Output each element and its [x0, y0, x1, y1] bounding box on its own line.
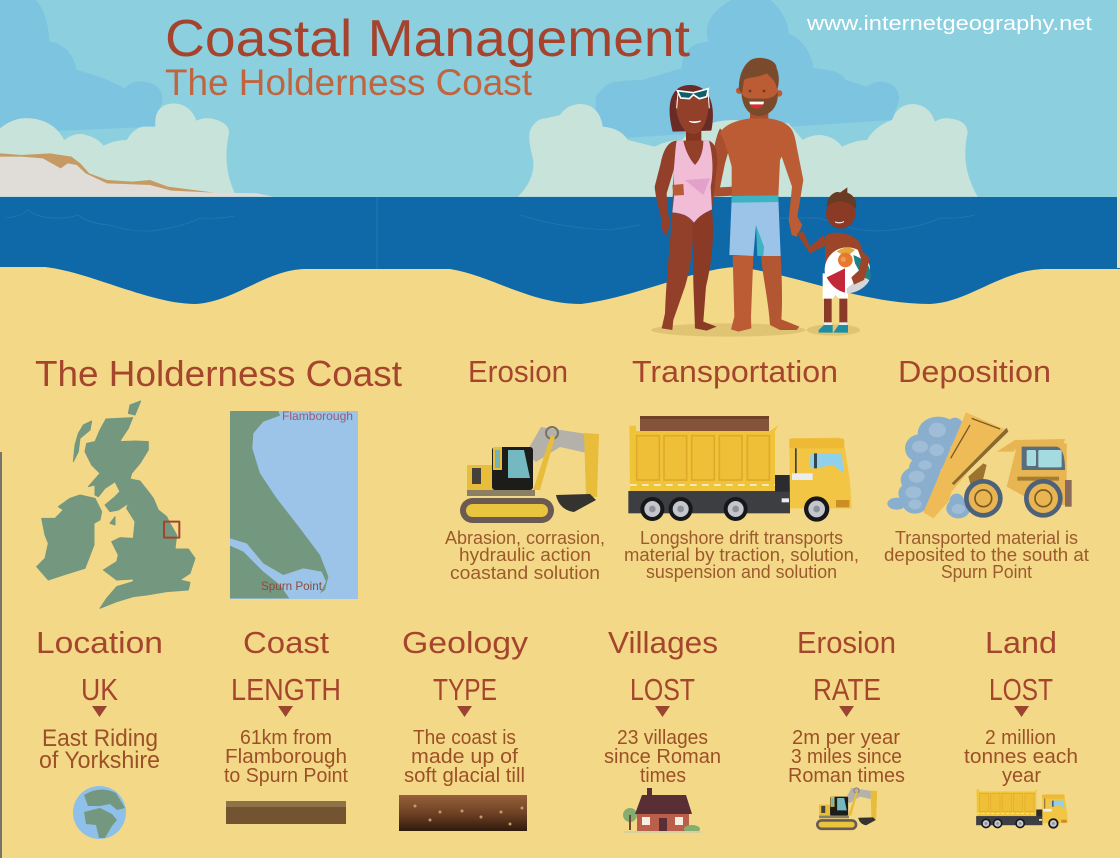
- icon: small excavator: [816, 788, 877, 830]
- text: erosion description: coastand solution: [450, 562, 600, 583]
- column: geology type: made up of: [411, 745, 518, 768]
- man's far arm: [708, 128, 733, 197]
- column: geology type: Geology: [402, 625, 529, 660]
- icon: house: [623, 788, 701, 833]
- sea: [0, 197, 1120, 307]
- column: erosion rate: [788, 625, 905, 830]
- column: villages lost: LOST: [630, 672, 695, 707]
- text: erosion description: [445, 527, 605, 583]
- background sky: [0, 0, 1120, 198]
- child with beach ball: [797, 187, 871, 333]
- icon: glacial till strata: [399, 795, 527, 831]
- icon: excavator: [460, 427, 599, 523]
- column: coast length: Flamborough: [225, 745, 347, 768]
- column: location: [36, 625, 163, 839]
- column: location: Location: [36, 625, 163, 660]
- column: villages lost: Villages: [608, 625, 718, 660]
- text: transportation description: [624, 527, 859, 582]
- map: UK location: [37, 401, 195, 608]
- column: coast length: to Spurn Point: [224, 764, 348, 787]
- column: coast length: Coast: [243, 625, 329, 660]
- text: erosion description: Abrasion, corrasion,: [445, 527, 605, 548]
- text: deposition description: [884, 527, 1089, 582]
- icon: tipper truck depositing rocks: [887, 412, 1072, 518]
- text: transportation description: suspension and solution: [646, 561, 837, 582]
- column: villages lost: [604, 625, 721, 833]
- title: Coastal Management: [165, 10, 691, 68]
- column: coast length: [224, 625, 348, 824]
- sand beach: [0, 267, 1120, 858]
- cliff headland: [0, 153, 273, 197]
- column: land lost: tonnes each: [964, 745, 1078, 768]
- map: holderness coast: Flamborough: [282, 409, 353, 423]
- column: erosion rate: 3 miles since: [791, 745, 902, 768]
- column: land lost: LOST: [989, 672, 1053, 707]
- column: geology type: TYPE: [433, 672, 497, 707]
- column: villages lost: times: [640, 764, 686, 787]
- heading: transportation: Transportation: [632, 354, 838, 389]
- column: land lost: 2 million: [985, 726, 1056, 749]
- column: coast length: 61km from: [240, 726, 332, 749]
- column: land lost: year: [1002, 764, 1041, 787]
- column: villages lost: 23 villages: [617, 726, 708, 749]
- map: holderness coast: Spurn Point: [261, 579, 323, 593]
- subtitle: The Holderness Coast: [165, 62, 533, 103]
- heading: the holderness coast: The Holderness Coast: [35, 353, 402, 394]
- heading: erosion: Erosion: [468, 354, 568, 389]
- icon: dump truck with soil: [628, 416, 852, 522]
- column: villages lost: since Roman: [604, 745, 721, 768]
- text: deposition description: deposited to the south at: [884, 544, 1089, 565]
- map: holderness coast: [230, 409, 358, 599]
- column: geology type: The coast is: [413, 726, 516, 749]
- text: transportation description: Longshore drift transports: [640, 527, 843, 548]
- text: transportation description: material by traction, solution,: [624, 544, 859, 565]
- pale clouds: [0, 103, 978, 197]
- icon: globe: [73, 786, 126, 839]
- column: location: UK: [81, 672, 118, 707]
- woman: [655, 85, 717, 331]
- text: erosion description: hydraulic action: [459, 544, 591, 565]
- column: location: East Riding: [42, 725, 158, 752]
- website url: www.internetgeography.net: [806, 13, 1093, 35]
- icon: soil strip: [226, 801, 346, 824]
- column: land lost: Land: [985, 625, 1057, 660]
- column: erosion rate: 2m per year: [792, 726, 900, 749]
- column: land lost: [964, 625, 1078, 829]
- heading: deposition: Deposition: [898, 354, 1051, 389]
- column: geology type: [399, 625, 529, 831]
- family illustration: [651, 58, 871, 337]
- text: deposition description: Spurn Point: [941, 561, 1032, 582]
- icon: small truck: [976, 789, 1068, 829]
- text: deposition description: Transported material is: [895, 527, 1078, 548]
- column: erosion rate: RATE: [813, 672, 881, 707]
- column: erosion rate: Roman times: [788, 764, 905, 787]
- man: [720, 58, 803, 332]
- column: geology type: soft glacial till: [404, 764, 525, 787]
- column: erosion rate: Erosion: [797, 625, 896, 660]
- column: coast length: LENGTH: [231, 672, 341, 707]
- dark clouds: [0, 0, 899, 140]
- column: location: of Yorkshire: [39, 747, 160, 774]
